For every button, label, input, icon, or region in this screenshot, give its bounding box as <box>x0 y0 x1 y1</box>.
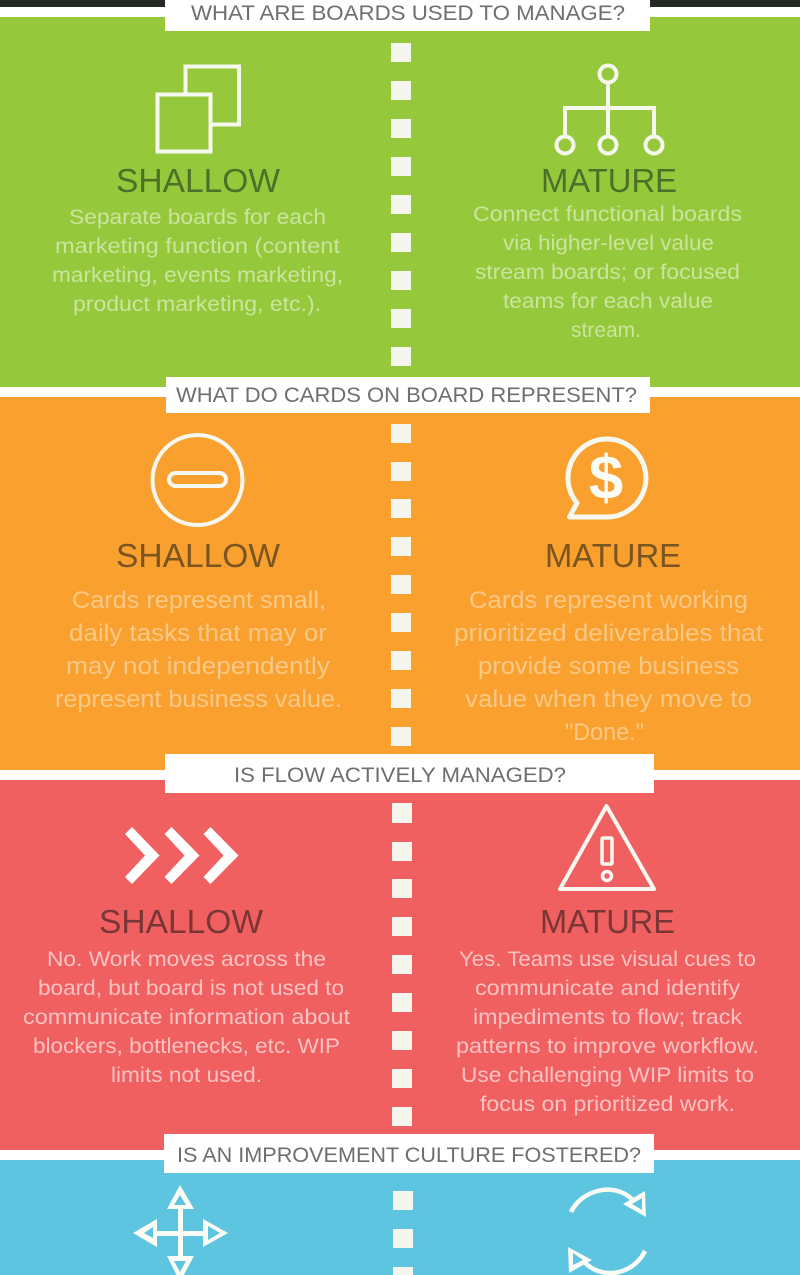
text: mature boards: stream. <box>571 318 641 342</box>
label: culture question <box>0 1134 800 1173</box>
text: mature boards: teams for each value <box>503 289 713 313</box>
icon: overlapping squares <box>158 66 239 152</box>
text: mature flow: Yes. Teams use visual cues to <box>459 947 756 971</box>
text: shallow boards: Separate boards for each <box>69 205 326 229</box>
text: shallow flow: communicate information about <box>23 1005 350 1029</box>
label: flow question <box>0 754 800 793</box>
icon: minus circle <box>152 435 242 525</box>
dashed divider: culture <box>393 1191 413 1275</box>
panel: flow <box>0 780 800 1150</box>
heading: shallow: SHALLOW <box>99 903 264 940</box>
icon: triple chevrons <box>125 827 238 884</box>
label: boards question <box>165 0 650 31</box>
text: shallow flow: board, but board is not used to <box>38 976 344 1000</box>
label: cards question: WHAT DO CARDS ON BOARD REPRESENT? <box>176 384 637 407</box>
text: mature flow: focus on prioritized work. <box>480 1092 735 1116</box>
text: mature boards: via higher-level value <box>503 231 714 255</box>
text: mature cards: "Done." <box>565 719 644 746</box>
heading: mature: MATURE <box>541 162 677 199</box>
dashed divider: boards <box>391 43 411 366</box>
icon: four-way arrows <box>133 1185 228 1275</box>
text: shallow cards: may not independently <box>66 653 330 680</box>
label: flow question: IS FLOW ACTIVELY MANAGED? <box>234 764 566 787</box>
text: mature flow: patterns to improve workflow. <box>456 1034 759 1058</box>
text: shallow flow: limits not used. <box>111 1063 262 1087</box>
text: shallow cards: Cards represent small, <box>72 587 326 614</box>
text: mature flow: communicate and identify <box>475 976 740 1000</box>
heading: shallow: SHALLOW <box>116 537 281 574</box>
text: mature cards: prioritized deliverables that <box>454 620 763 647</box>
label: culture question: IS AN IMPROVEMENT CULTURE FOSTERED? <box>177 1144 641 1167</box>
text: shallow flow: blockers, bottlenecks, etc. WIP <box>33 1034 340 1058</box>
text: shallow flow <box>23 947 350 1087</box>
text: shallow boards <box>52 205 343 316</box>
text: mature cards: value when they move to <box>465 686 752 713</box>
text: shallow cards <box>55 587 342 713</box>
icon: hierarchy <box>556 66 662 154</box>
icon: dollar speech bubble: $ <box>589 444 623 513</box>
icon: cycle arrows <box>568 1190 646 1273</box>
dashed divider: cards <box>391 424 411 746</box>
dashed divider: flow <box>392 803 412 1126</box>
text: mature boards: Connect functional boards <box>473 202 742 226</box>
icon: warning triangle <box>560 806 654 889</box>
text: shallow boards: product marketing, etc.). <box>73 292 321 316</box>
text: mature cards <box>454 587 763 746</box>
text: shallow flow: No. Work moves across the <box>47 947 326 971</box>
text: shallow cards: represent business value. <box>55 686 342 713</box>
text: mature flow: impediments to flow; track <box>473 1005 742 1029</box>
top dark bar <box>0 0 800 7</box>
text: mature cards: provide some business <box>478 653 739 680</box>
panel: improvement culture <box>0 1160 800 1275</box>
text: mature flow: Use challenging WIP limits to <box>461 1063 754 1087</box>
text: shallow boards: marketing, events marketing, <box>52 263 343 287</box>
text: shallow cards: daily tasks that may or <box>69 620 327 647</box>
text: mature boards: stream boards; or focused <box>475 260 740 284</box>
heading: mature: MATURE <box>545 537 681 574</box>
text: mature boards <box>473 202 742 342</box>
text: mature cards: Cards represent working <box>469 587 748 614</box>
text: shallow boards: marketing function (content <box>55 234 340 258</box>
icon: dollar speech bubble <box>568 439 646 517</box>
text: mature flow <box>456 947 759 1116</box>
label: boards question: WHAT ARE BOARDS USED TO MANAGE? <box>191 2 625 25</box>
heading: mature: MATURE <box>540 903 675 940</box>
label: cards question <box>0 377 800 413</box>
panel: cards <box>0 397 800 770</box>
panel: boards <box>0 17 800 387</box>
heading: shallow: SHALLOW <box>116 162 281 199</box>
